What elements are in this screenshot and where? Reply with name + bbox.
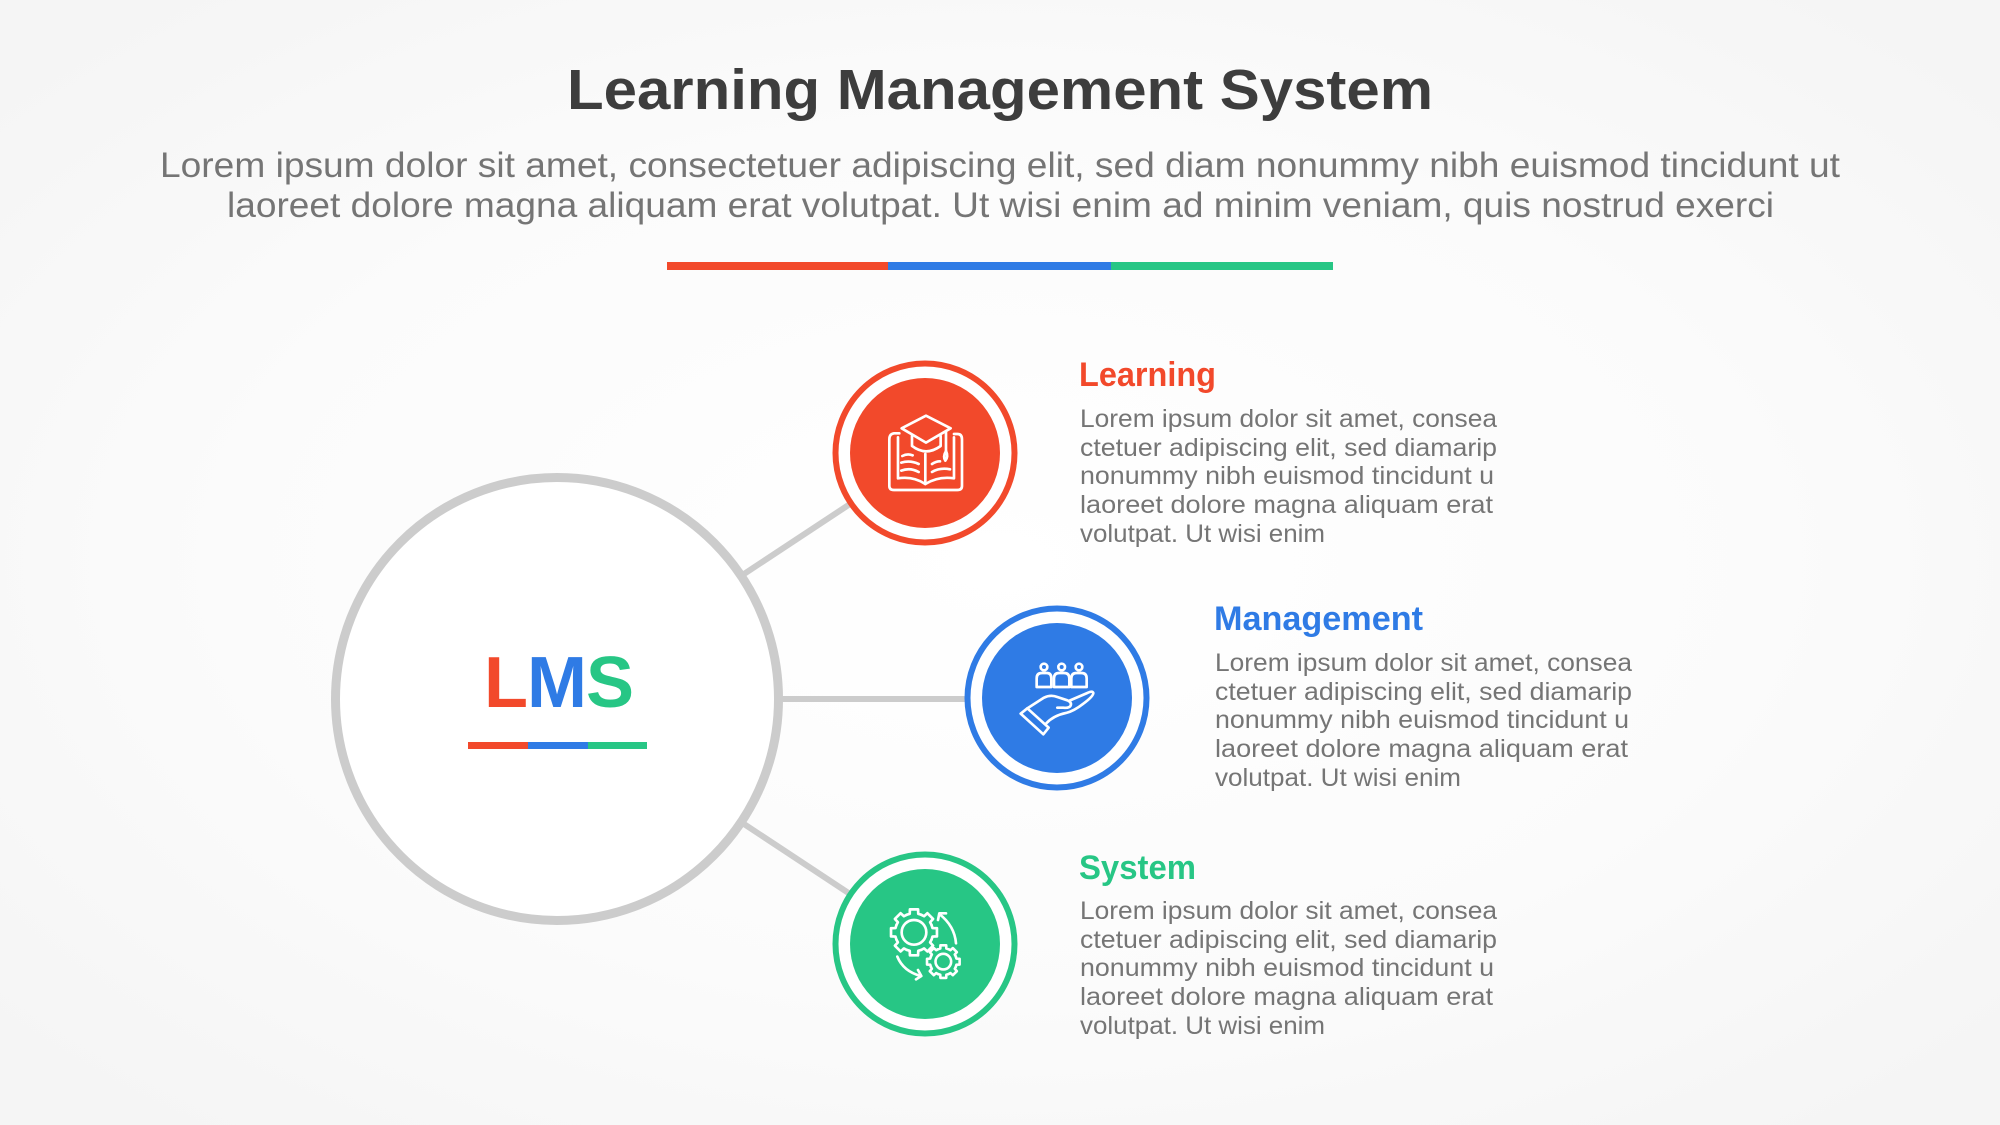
- description: learning: volutpat. Ut wisi enim: [1080, 520, 1325, 548]
- description: management: volutpat. Ut wisi enim: [1215, 764, 1461, 792]
- description: management: nonummy nibh euismod tincidunt u: [1215, 706, 1629, 734]
- connector: hub to management: [780, 696, 966, 702]
- heading: learning: Learning: [1079, 356, 1216, 394]
- hub label LMS: L: [484, 643, 528, 723]
- description: system: nonummy nibh euismod tincidunt u: [1080, 954, 1494, 982]
- heading: management: Management: [1214, 600, 1423, 638]
- description: system: laoreet dolore magna aliquam erat: [1080, 983, 1493, 1011]
- description: system: [1080, 897, 1497, 1040]
- node: learning: [836, 364, 1014, 542]
- description: learning: laoreet dolore magna aliquam erat: [1080, 491, 1493, 519]
- icon: gears with cycle arrows: [891, 909, 960, 979]
- node: system: [836, 854, 1014, 1034]
- icon: book with graduation cap: [889, 416, 962, 490]
- connector: hub to learning: [744, 504, 850, 574]
- heading: system: System: [1079, 849, 1196, 887]
- title: Learning Management System: [567, 58, 1433, 122]
- description: learning: [1080, 405, 1497, 548]
- tricolor header divider: [667, 262, 1333, 270]
- description: learning: nonummy nibh euismod tincidunt u: [1080, 462, 1494, 490]
- subtitle text block: Lorem ipsum dolor sit amet, consectetuer adipiscing elit, sed diam nonummy nibh euismod tincidunt ut: [160, 146, 1840, 185]
- description: system: ctetuer adipiscing elit, sed diamarip: [1080, 926, 1497, 954]
- description: system: Lorem ipsum dolor sit amet, consea: [1080, 897, 1497, 925]
- hub underline: [468, 742, 647, 749]
- description: management: laoreet dolore magna aliquam erat: [1215, 735, 1628, 763]
- connector: hub to system: [744, 824, 850, 894]
- hub label LMS: S: [586, 643, 634, 723]
- description: management: Lorem ipsum dolor sit amet, consea: [1215, 649, 1632, 677]
- description: management: [1215, 649, 1632, 792]
- subtitle text block: [160, 146, 1840, 225]
- description: learning: ctetuer adipiscing elit, sed diamarip: [1080, 434, 1497, 462]
- description: learning: Lorem ipsum dolor sit amet, consea: [1080, 405, 1497, 433]
- icon: hand holding people: [1021, 664, 1093, 734]
- description: management: ctetuer adipiscing elit, sed diamarip: [1215, 678, 1632, 706]
- hub label LMS: M: [527, 643, 587, 723]
- subtitle text block: laoreet dolore magna aliquam erat volutpat. Ut wisi enim ad minim veniam, quis nostrud exerci: [227, 186, 1774, 225]
- description: system: volutpat. Ut wisi enim: [1080, 1012, 1325, 1040]
- central hub circle: [336, 478, 778, 920]
- node: management: [968, 608, 1146, 788]
